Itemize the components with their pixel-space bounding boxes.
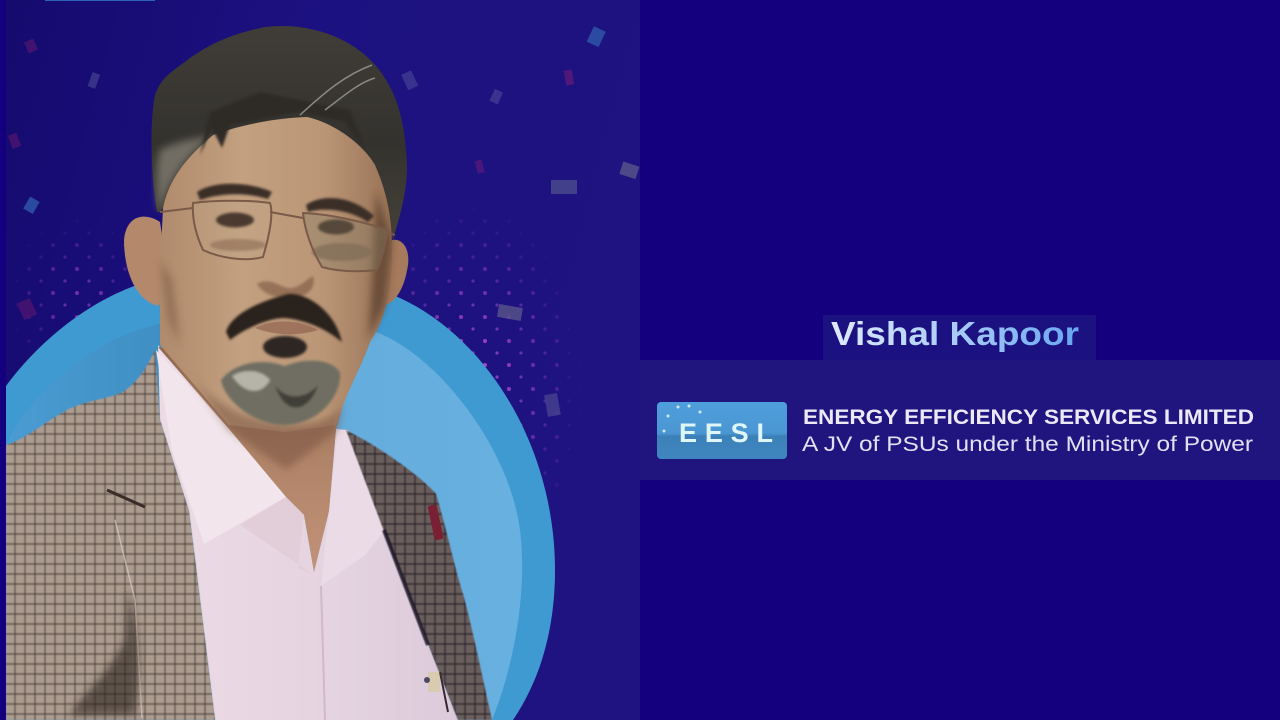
lips <box>255 321 318 334</box>
goatee <box>221 361 340 425</box>
confetti <box>8 26 639 417</box>
panel: portrait background <box>6 0 640 720</box>
inner blue circle <box>6 312 522 720</box>
glasses <box>160 201 395 271</box>
eyes <box>210 212 372 261</box>
soul patch <box>263 336 307 358</box>
lower third band <box>640 360 1280 480</box>
hair fringe <box>200 65 375 155</box>
eyebrows <box>197 184 374 222</box>
logo stars <box>662 404 702 432</box>
name heading: Vishal Kapoor <box>831 315 1079 352</box>
jacket right <box>346 430 492 720</box>
left ear <box>124 216 162 306</box>
portrait of Vishal Kapoor <box>6 26 492 720</box>
outer blue circle <box>6 269 555 720</box>
nose <box>257 276 314 298</box>
neck <box>158 347 350 572</box>
company tagline: A JV of PSUs under the Ministry of Power <box>802 433 1253 456</box>
logo wordmark: EESL <box>679 418 773 448</box>
logo: EESL <box>657 402 787 459</box>
grey temple hair <box>157 136 212 212</box>
moustache <box>226 294 342 342</box>
lapel pin <box>428 504 444 540</box>
face shading <box>160 190 392 470</box>
shirt collar <box>156 350 385 720</box>
hair <box>151 26 407 240</box>
shirt <box>158 345 458 720</box>
right ear <box>380 240 408 305</box>
jacket left <box>6 350 215 720</box>
face <box>160 117 392 432</box>
pocket pen <box>424 672 448 712</box>
name highlight box <box>823 315 1096 361</box>
company name: ENERGY EFFICIENCY SERVICES LIMITED <box>803 406 1254 429</box>
